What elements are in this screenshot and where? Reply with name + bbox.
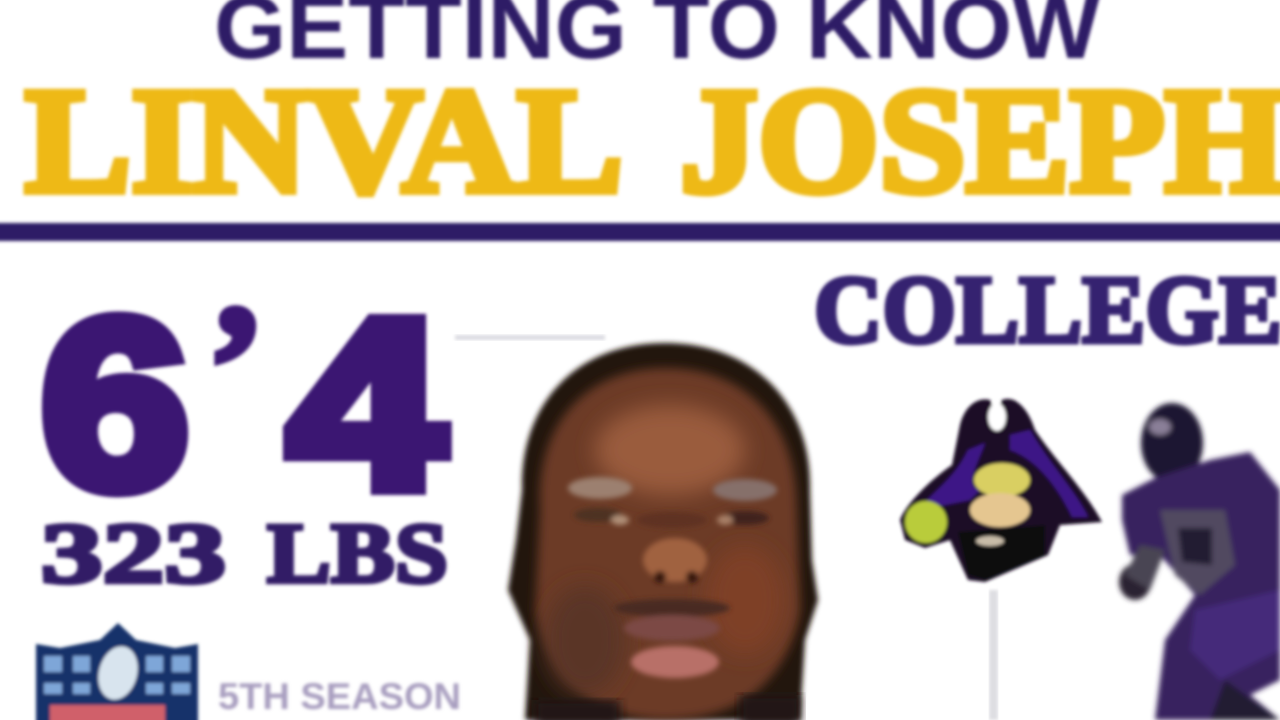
college heading: COLLEGE: [814, 256, 1280, 363]
icon: pirate college logo: [900, 399, 1102, 582]
eyes: [568, 477, 777, 525]
height apostrophe: ’: [207, 269, 265, 463]
title: player name: JOSEPH: [680, 58, 1280, 224]
height connector line: [455, 335, 605, 340]
header divider: [0, 223, 1280, 241]
title: player name: [25, 58, 1280, 224]
season label: 5TH SEASON: [218, 676, 461, 717]
height stat: [41, 270, 444, 538]
weight stat: [41, 505, 448, 601]
height stat: 6: [41, 270, 189, 538]
player headshot: [508, 343, 818, 720]
college connector line: [989, 590, 998, 720]
height stat: 4: [288, 270, 444, 538]
mouth: [614, 599, 730, 678]
nose: [637, 512, 707, 583]
icon: NFL shield: [36, 623, 198, 720]
weight stat: 323: [41, 505, 226, 601]
player action photo: [1119, 403, 1280, 720]
weight stat: LBS: [267, 505, 448, 601]
title: player name: LINVAL: [25, 58, 623, 224]
